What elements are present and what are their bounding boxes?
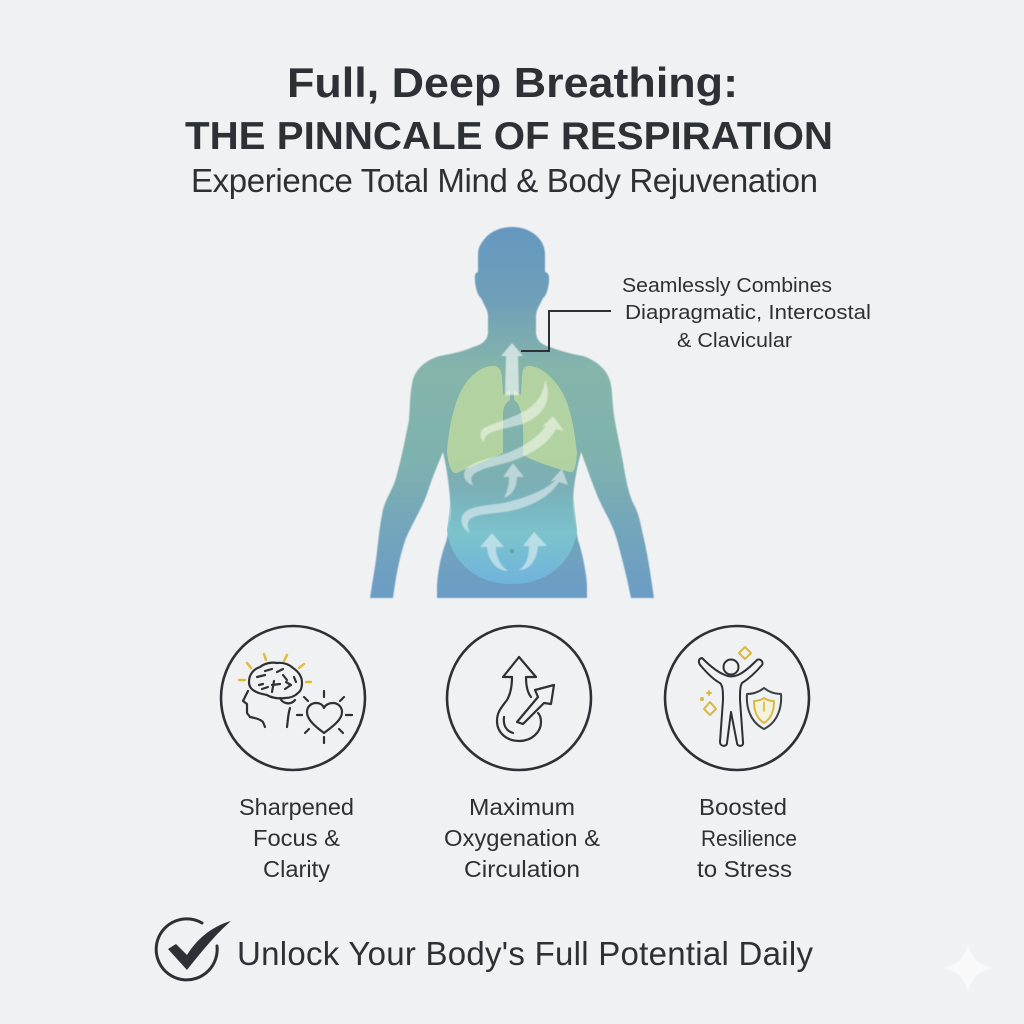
arrow: middle swirl bbox=[464, 416, 564, 485]
heart bbox=[307, 703, 342, 733]
shield bbox=[747, 688, 781, 729]
label: oxygenation: Circulation bbox=[464, 856, 580, 882]
arrow: upper swirl bbox=[480, 380, 548, 442]
label: oxygenation: Oxygenation & bbox=[444, 825, 600, 851]
label: focus: Sharpened bbox=[239, 794, 354, 820]
closing message: Unlock Your Body's Full Potential Daily bbox=[237, 935, 814, 972]
silhouette bbox=[370, 227, 654, 598]
arrow: belly right bbox=[519, 532, 547, 570]
arrow: trachea bbox=[501, 343, 523, 395]
icon: checkmark bbox=[156, 919, 231, 980]
callout text: Seamlessly Combines bbox=[622, 274, 832, 297]
arrow: small rising bbox=[503, 463, 524, 498]
sparkles bbox=[701, 647, 751, 715]
label: resilience: Resilience bbox=[701, 826, 797, 851]
belly glow bbox=[447, 480, 577, 584]
icon: oxygen arrows bbox=[447, 626, 591, 770]
icon: person with shield bbox=[665, 626, 809, 770]
callout text bbox=[622, 274, 871, 352]
arrow: lower swirl bbox=[461, 469, 568, 533]
callout text: & Clavicular bbox=[677, 329, 792, 352]
callout text: Diapragmatic, Intercostal bbox=[625, 301, 871, 324]
title: THE PINNCALE OF RESPIRATION bbox=[185, 115, 833, 158]
label: resilience bbox=[697, 794, 797, 882]
label: resilience: to Stress bbox=[697, 856, 792, 882]
label: focus: Clarity bbox=[263, 856, 331, 882]
sparkle watermark bbox=[943, 944, 993, 992]
title bbox=[185, 59, 833, 158]
lungs bbox=[447, 366, 577, 473]
subtitle: Experience Total Mind & Body Rejuvenation bbox=[191, 162, 818, 199]
label: oxygenation: Maximum bbox=[469, 794, 575, 820]
breath arrows bbox=[461, 343, 568, 571]
label: focus bbox=[239, 794, 354, 882]
body diagram bbox=[370, 227, 654, 598]
icon: brain and heart bbox=[221, 626, 365, 770]
brain outline bbox=[249, 663, 302, 698]
arrow: belly left bbox=[480, 533, 508, 571]
brain rays bbox=[239, 654, 311, 682]
label: oxygenation bbox=[444, 794, 600, 882]
label: resilience: Boosted bbox=[699, 794, 787, 820]
callout leader line bbox=[521, 311, 611, 351]
face and neck bbox=[243, 691, 265, 727]
navel bbox=[510, 549, 514, 553]
title: Full, Deep Breathing: bbox=[287, 59, 738, 106]
label: focus: Focus & bbox=[253, 825, 340, 851]
